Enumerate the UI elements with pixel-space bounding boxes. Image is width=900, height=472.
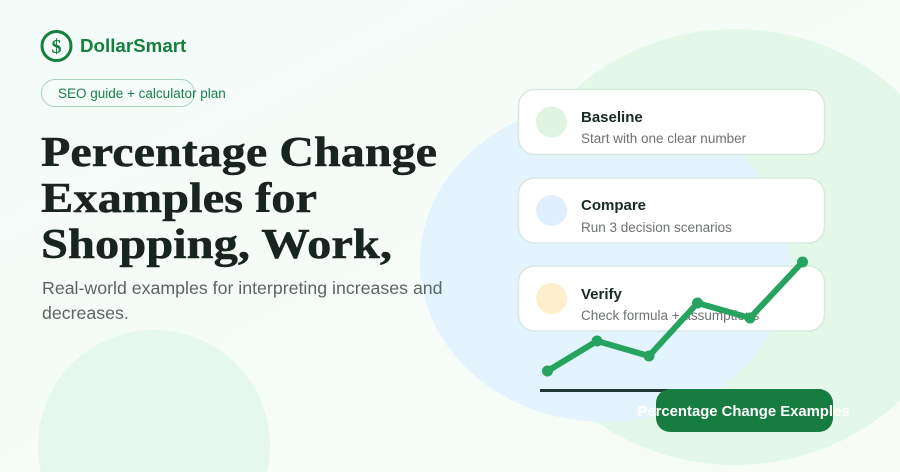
icon: amber dot [536, 283, 567, 314]
card text: Verify: Check formula + assumptions [581, 308, 759, 323]
icon: green dot [536, 106, 567, 138]
subtitle: decreases. [42, 303, 129, 323]
background blob: green right [503, 29, 900, 465]
brand name: DollarSmart [80, 35, 187, 56]
line chart [542, 256, 808, 376]
icon: dollar coin: $ [52, 36, 62, 58]
background blob: green bottom left [38, 330, 270, 472]
tag pill: SEO guide + calculator plan [58, 86, 226, 101]
background blob: blue [420, 102, 790, 422]
title [41, 130, 437, 268]
card: Verify [518, 266, 824, 331]
card: Baseline [518, 90, 824, 154]
icon: dollar coin [42, 32, 71, 60]
card text: Compare [581, 197, 732, 235]
icon: blue dot [536, 195, 567, 226]
chart axis [540, 389, 815, 392]
card text: Verify: Verify [581, 286, 623, 303]
card text: Baseline [581, 109, 747, 146]
card text: Compare: Run 3 decision scenarios [581, 220, 732, 235]
title: Percentage Change [41, 130, 437, 176]
card: Compare [518, 178, 824, 243]
subtitle [42, 278, 443, 323]
card text: Verify [581, 286, 759, 323]
button [637, 389, 850, 432]
card text: Baseline: Baseline [581, 109, 643, 126]
button: Percentage Change Examples [637, 404, 850, 420]
title: Shopping, Work, [41, 222, 392, 268]
tag pill [42, 80, 226, 106]
subtitle: Real-world examples for interpreting increases and [42, 278, 443, 298]
title: Examples for [41, 176, 317, 222]
card text: Baseline: Start with one clear number [581, 131, 747, 146]
card text: Compare: Compare [581, 197, 646, 214]
logo [42, 32, 187, 60]
